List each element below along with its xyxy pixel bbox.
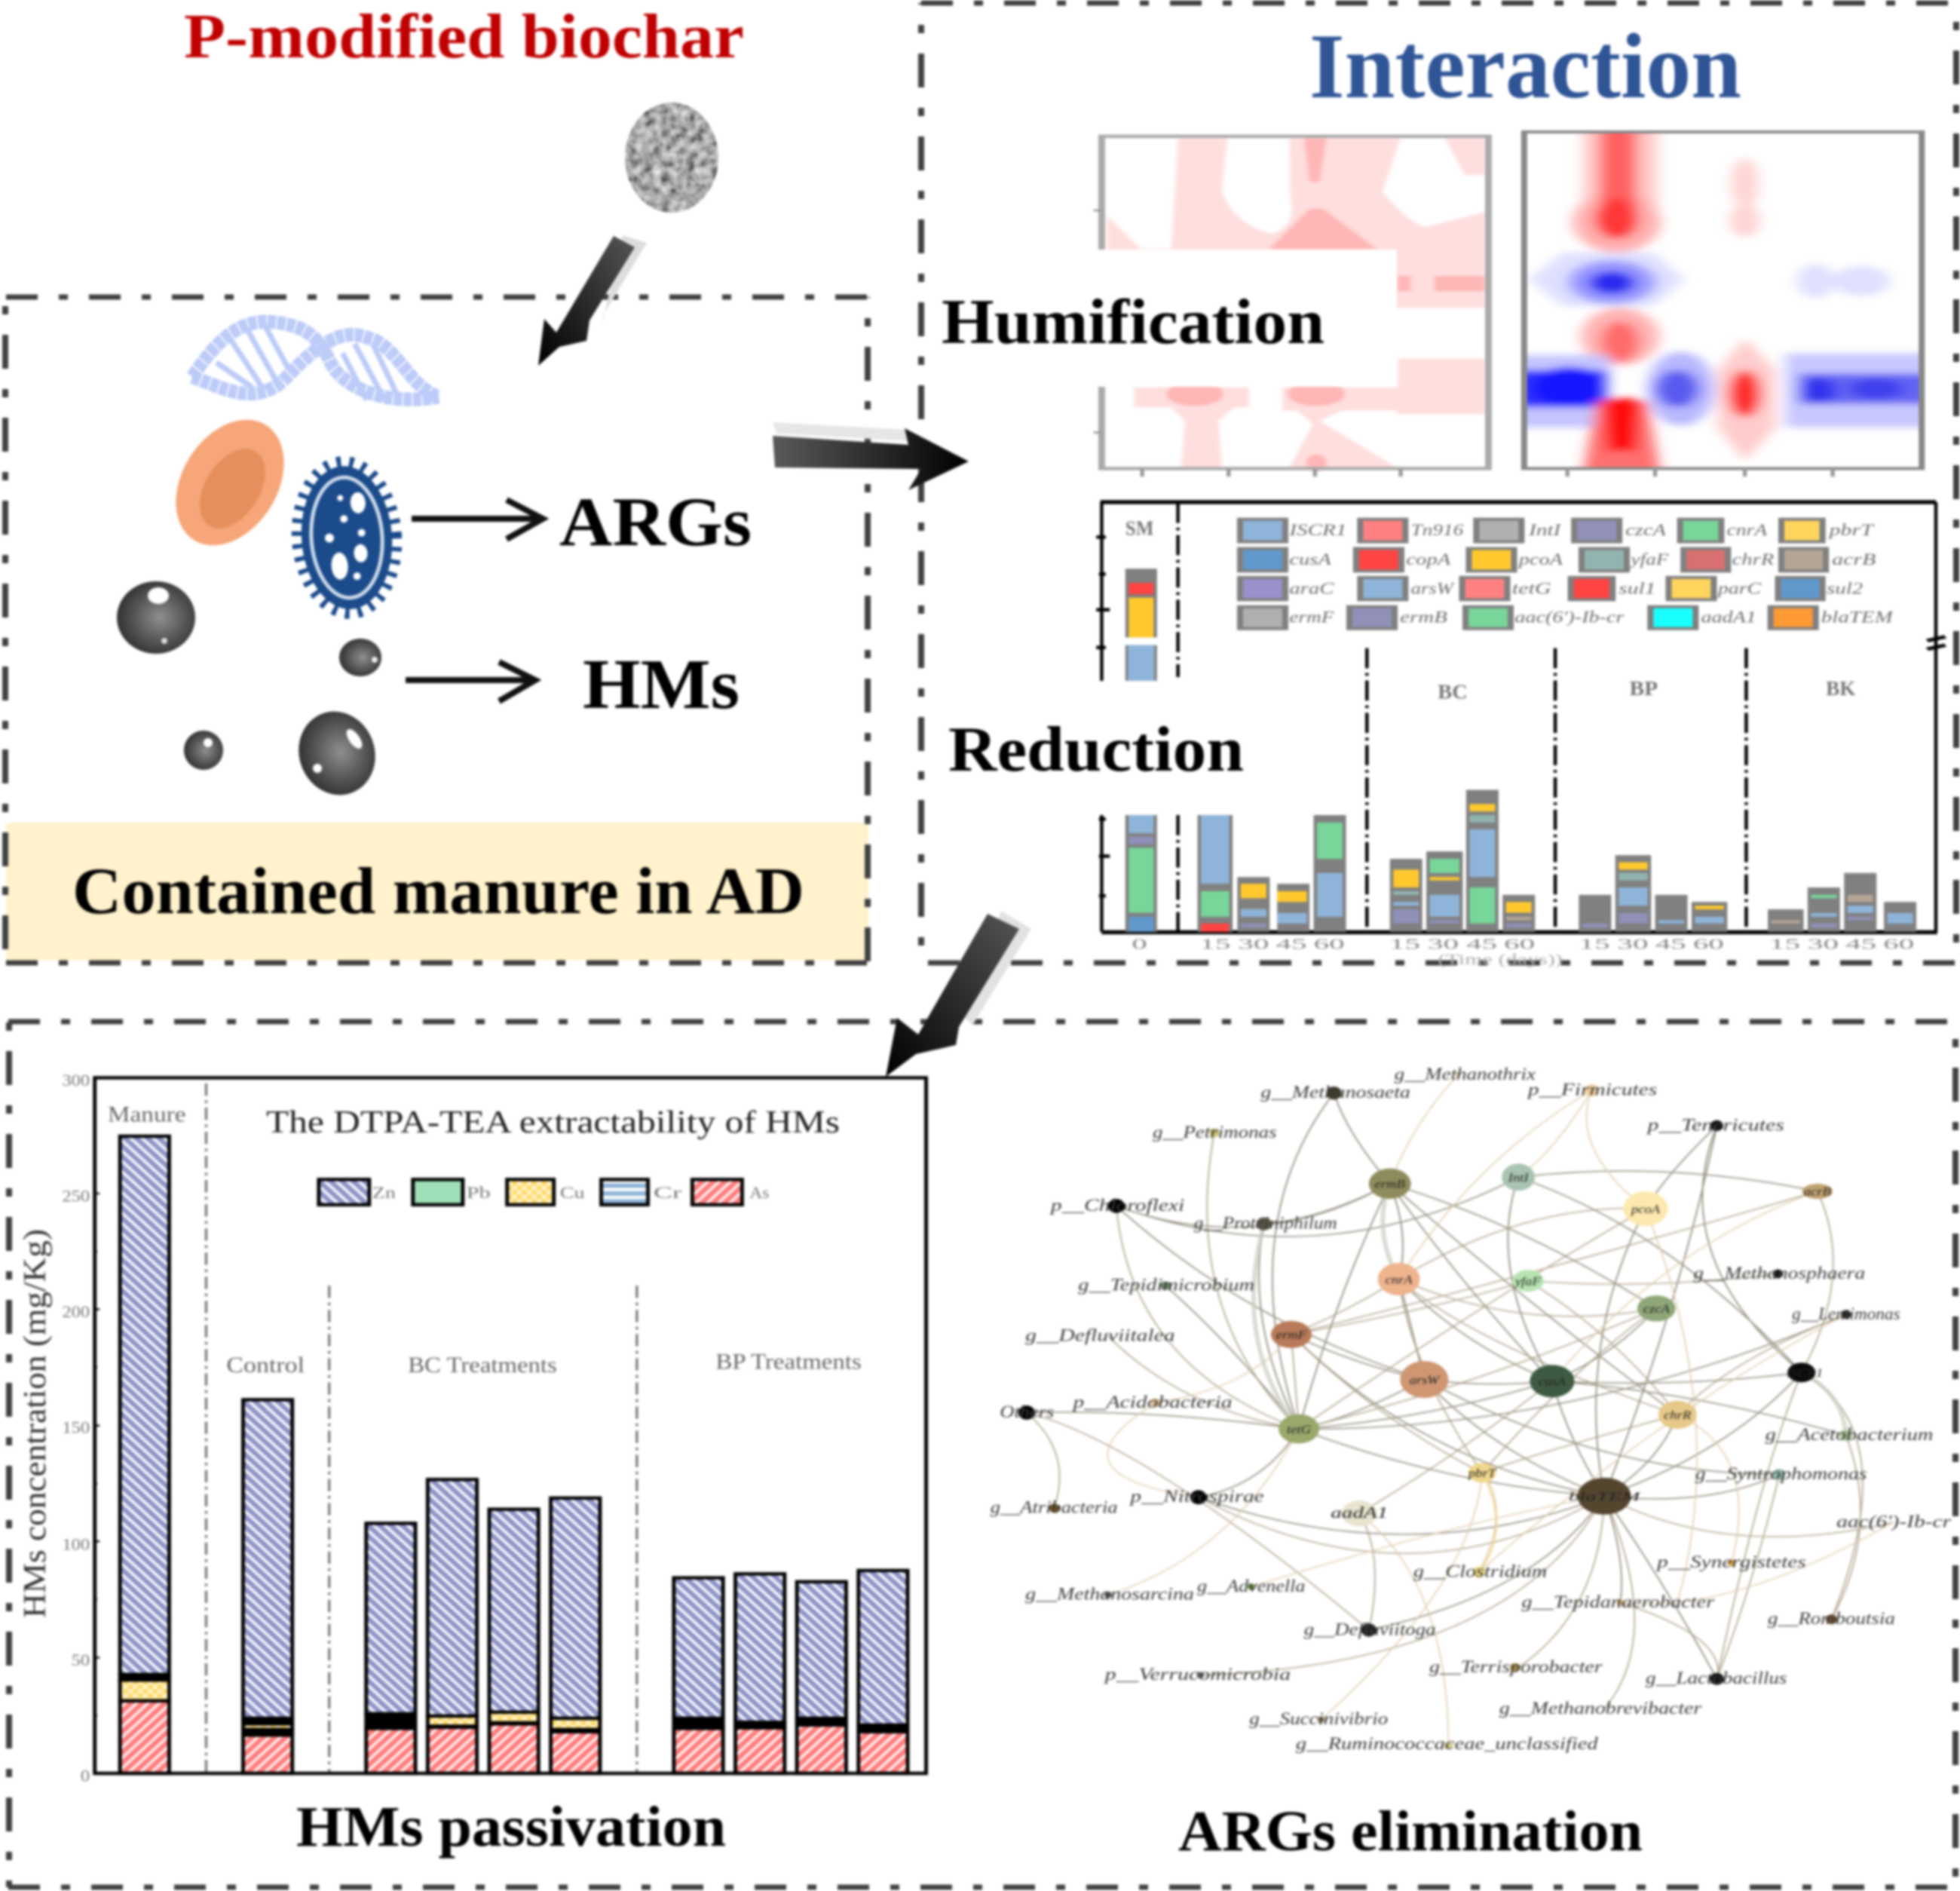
legend labels: IntI: [1528, 520, 1562, 539]
taxa labels: g__Atribacteria: [991, 1497, 1118, 1517]
taxa labels: g__Methanobrevibacter: [1499, 1698, 1702, 1718]
x axis tick labels: 15: [1389, 936, 1420, 953]
x axis tick labels: 30: [1238, 936, 1269, 953]
taxa labels: g__Advenella: [1197, 1576, 1305, 1595]
taxa labels: g__Petrimonas: [1153, 1122, 1277, 1142]
x axis tick labels: 15: [1769, 936, 1800, 953]
taxa labels: g__Lentimonas: [1792, 1304, 1900, 1323]
legend labels: aadA1: [1701, 608, 1756, 627]
legend labels: sul1: [1619, 578, 1655, 597]
taxa labels: g__Ruminococcaceae_unclassified: [1296, 1733, 1598, 1754]
dividers: [206, 1083, 637, 1772]
taxa labels: g__Tepidimicrobium: [1078, 1275, 1254, 1295]
arrow: manure to interaction: [773, 428, 969, 490]
ARG node labels: pbrT: [1467, 1467, 1497, 1480]
taxa labels: Others: [1000, 1402, 1054, 1421]
ARG node labels: IntI: [1508, 1171, 1530, 1185]
legend labels: Cu: [560, 1184, 585, 1203]
cream banner: [6, 823, 868, 960]
ARG node labels: [1276, 1171, 1831, 1522]
legend labels: czcA: [1625, 520, 1666, 539]
taxa labels: g__Defluviitoga: [1304, 1619, 1435, 1639]
taxa labels: p__Chloroflexi: [1049, 1195, 1184, 1215]
taxa labels: g__Methanothrix: [1395, 1064, 1536, 1083]
legend labels: copA: [1406, 550, 1451, 569]
bars: BC: [1390, 790, 1535, 932]
y axis tick labels: 50: [72, 1651, 90, 1670]
taxa labels: g__Defluviitalea: [1025, 1325, 1174, 1345]
heading: HMs passivation: HMs passivation: [296, 1795, 726, 1859]
ARG node labels: cusA: [1539, 1375, 1566, 1388]
taxa labels: g__Romboutsia: [1768, 1608, 1895, 1629]
icon: blue bacterium: [292, 458, 402, 617]
legend labels: aac(6')-Ib-cr: [1514, 608, 1625, 627]
legend labels: yfaF: [1629, 550, 1669, 569]
x axis tick labels: 60: [1693, 936, 1724, 953]
icon: DNA helix: [192, 322, 439, 400]
taxa labels: p__Verrucomicrobia: [1103, 1664, 1291, 1684]
legend labels: Tn916: [1410, 520, 1464, 539]
ARG node labels: yfaF: [1514, 1275, 1541, 1288]
x axis tick labels: 60: [1883, 936, 1914, 953]
icon: orange cell: [154, 400, 306, 565]
ARG node labels: pcoA: [1630, 1203, 1661, 1215]
taxa labels: g__Terrisporobacter: [1429, 1657, 1603, 1677]
icon: biochar particle: [622, 100, 721, 216]
taxa labels: g__Tepidanaerobacter: [1521, 1592, 1715, 1611]
panel: interaction: [921, 3, 1960, 968]
legend labels: [1288, 520, 1894, 627]
legend labels: Cr: [654, 1184, 682, 1203]
legend labels: cnrA: [1726, 520, 1768, 539]
bars: BC treatments: [366, 1479, 600, 1773]
label: ARGs: ARGs: [559, 483, 752, 560]
bars: control: [1198, 815, 1346, 932]
y axis tick labels: 300: [62, 1071, 90, 1090]
legend labels: cusA: [1289, 550, 1331, 569]
x axis tick labels: 45: [1655, 936, 1686, 953]
ARG node labels: chrR: [1664, 1408, 1692, 1422]
taxa labels: p__Tenericutes: [1646, 1114, 1784, 1135]
y axis tick labels: 250: [62, 1187, 90, 1206]
chart: ARG stacked bars: BK: [1826, 677, 1855, 700]
legend labels: pbrT: [1827, 520, 1875, 539]
group labels: BP Treatments: [715, 1349, 862, 1374]
heading: Interaction: Interaction: [1309, 14, 1741, 118]
chart: left 2D correlation heatmap: [1094, 136, 1488, 477]
banner label: Contained manure in AD: [72, 855, 804, 928]
taxa labels: [991, 1064, 1952, 1754]
heading: ARGs elimination: ARGs elimination: [1178, 1800, 1643, 1863]
bars: SM: [1125, 569, 1157, 932]
bars: manure: [120, 1136, 169, 1773]
ARG node labels: ISCR1: [1786, 1366, 1823, 1380]
white mask: Humification: [935, 250, 1397, 387]
legend labels: [372, 1184, 769, 1203]
ARG node labels: ermB: [1375, 1178, 1405, 1191]
legend labels: Pb: [467, 1184, 491, 1203]
taxa labels: g__Acetobacterium: [1766, 1424, 1933, 1445]
panel: results: [8, 1022, 1955, 1887]
legend labels: chrR: [1732, 550, 1774, 569]
x axis title: (Time (days)): [1438, 952, 1563, 968]
taxa labels: g__Succinivibrio: [1249, 1709, 1388, 1729]
group labels: BC Treatments: [408, 1352, 557, 1378]
legend labels: blaTEM: [1821, 608, 1894, 627]
y axis tick labels: 100: [62, 1535, 90, 1554]
legend labels: arsW: [1410, 578, 1456, 597]
arrow: to ARGs: [412, 500, 543, 539]
arrow: interaction to manure: [773, 422, 908, 441]
x axis tick labels: 0: [1132, 936, 1147, 953]
y axis tick labels: [62, 1071, 90, 1785]
legend labels: As: [749, 1184, 769, 1203]
y axis tick labels: 150: [62, 1418, 90, 1437]
legend labels: pcoA: [1517, 550, 1563, 569]
arrow: to HMs: [406, 662, 535, 701]
taxa labels: g__Proteiniphilum: [1194, 1213, 1337, 1233]
x axis tick labels: [1132, 936, 1914, 953]
legend labels: sul2: [1827, 578, 1863, 597]
legend labels: acrB: [1832, 550, 1876, 569]
ARG node labels: tetG: [1287, 1423, 1312, 1436]
legend labels: ermB: [1400, 608, 1447, 627]
chart title: The DTPA-TEA extractability of HMs: [266, 1105, 840, 1140]
group labels: Control: [226, 1352, 305, 1378]
label: Reduction: Reduction: [948, 714, 1244, 785]
ARG nodes: [1271, 1163, 1833, 1527]
group labels: BC: [1438, 681, 1468, 703]
x axis tick labels: 30: [1808, 936, 1839, 953]
ARG node labels: czcA: [1643, 1302, 1670, 1316]
panel: contained manure: [5, 297, 868, 963]
chart frame: [1096, 502, 1946, 932]
legend labels: ermF: [1289, 608, 1334, 627]
legend: metals: [319, 1179, 742, 1205]
taxa labels: p__Nitrospirae: [1129, 1486, 1264, 1506]
y axis tick labels: 0: [81, 1767, 90, 1785]
taxa labels: aac(6')-Ib-cr: [1836, 1511, 1952, 1531]
taxa labels: g__Methanosaeta: [1260, 1082, 1410, 1102]
y axis title: HMs concentration (mg/Kg): [18, 1229, 53, 1618]
x axis tick labels: 45: [1276, 936, 1307, 953]
legend labels: ISCR1: [1288, 520, 1346, 539]
taxa labels: g__Clostridium: [1413, 1561, 1547, 1581]
ARG node labels: cnrA: [1385, 1273, 1413, 1286]
group labels: [108, 1102, 862, 1378]
ARG node labels: acrB: [1804, 1185, 1831, 1198]
label: Humification: Humification: [942, 287, 1325, 357]
bars: control: [243, 1399, 292, 1773]
x axis tick labels: 60: [1314, 936, 1345, 953]
chart: ARG stacked bars: [1096, 502, 1946, 968]
x axis tick labels: 30: [1428, 936, 1459, 953]
arrow: interaction to results: [886, 911, 1031, 1077]
group labels: Manure: [108, 1102, 186, 1126]
chart frame: [95, 1077, 926, 1773]
x axis tick labels: 45: [1845, 936, 1876, 953]
group labels: [1125, 517, 1855, 703]
network edges: [1027, 1074, 1894, 1745]
chart: HMs stacked bars: [62, 1071, 926, 1785]
label: HMs: HMs: [583, 645, 740, 724]
x axis tick labels: 60: [1504, 936, 1535, 953]
ARG node labels: blaTEM: [1569, 1490, 1642, 1503]
x axis tick labels: 15: [1199, 936, 1230, 953]
x axis tick labels: 45: [1466, 936, 1497, 953]
chart: right 2D correlation heatmap: [1512, 124, 1934, 477]
taxa labels: p__Synergistetes: [1655, 1552, 1806, 1572]
legend labels: tetG: [1512, 578, 1551, 597]
ARG node labels: aadA1: [1331, 1504, 1388, 1522]
legend labels: araC: [1289, 578, 1334, 597]
title: P-modified biochar: P-modified biochar: [184, 2, 744, 72]
bars: BK: [1768, 873, 1916, 932]
ARG node labels: ermF: [1276, 1329, 1307, 1341]
x axis tick labels: 15: [1579, 936, 1610, 953]
taxa labels: g__Methanosphaera: [1693, 1263, 1865, 1283]
taxa labels: p__Acidobacteria: [1071, 1392, 1232, 1412]
taxa nodes: [1018, 1072, 1852, 1749]
legend: ARG genes: [1240, 519, 1826, 629]
taxa labels: g__Methanosarcina: [1025, 1584, 1194, 1604]
y axis ticks: [93, 1077, 100, 1715]
group labels: SM: [1125, 517, 1153, 540]
legend labels: parC: [1716, 578, 1761, 597]
bars: BP treatments: [674, 1571, 908, 1773]
y axis tick labels: 200: [62, 1303, 90, 1322]
icon: heavy-metal droplets: [117, 581, 387, 806]
taxa labels: p__Firmicutes: [1527, 1080, 1657, 1099]
group labels: BP: [1630, 677, 1658, 700]
arrow: biochar into manure: [538, 235, 647, 366]
chart: ARG-taxa network: [991, 1064, 1952, 1754]
taxa labels: g__Syntrophomonas: [1695, 1463, 1867, 1483]
taxa labels: g__Lactobacillus: [1646, 1668, 1787, 1688]
bars: BP: [1579, 855, 1727, 932]
ARG node labels: arsW: [1410, 1374, 1441, 1387]
white mask: Reduction: [935, 681, 1358, 815]
x axis tick labels: 30: [1617, 936, 1649, 953]
legend labels: Zn: [372, 1184, 396, 1203]
